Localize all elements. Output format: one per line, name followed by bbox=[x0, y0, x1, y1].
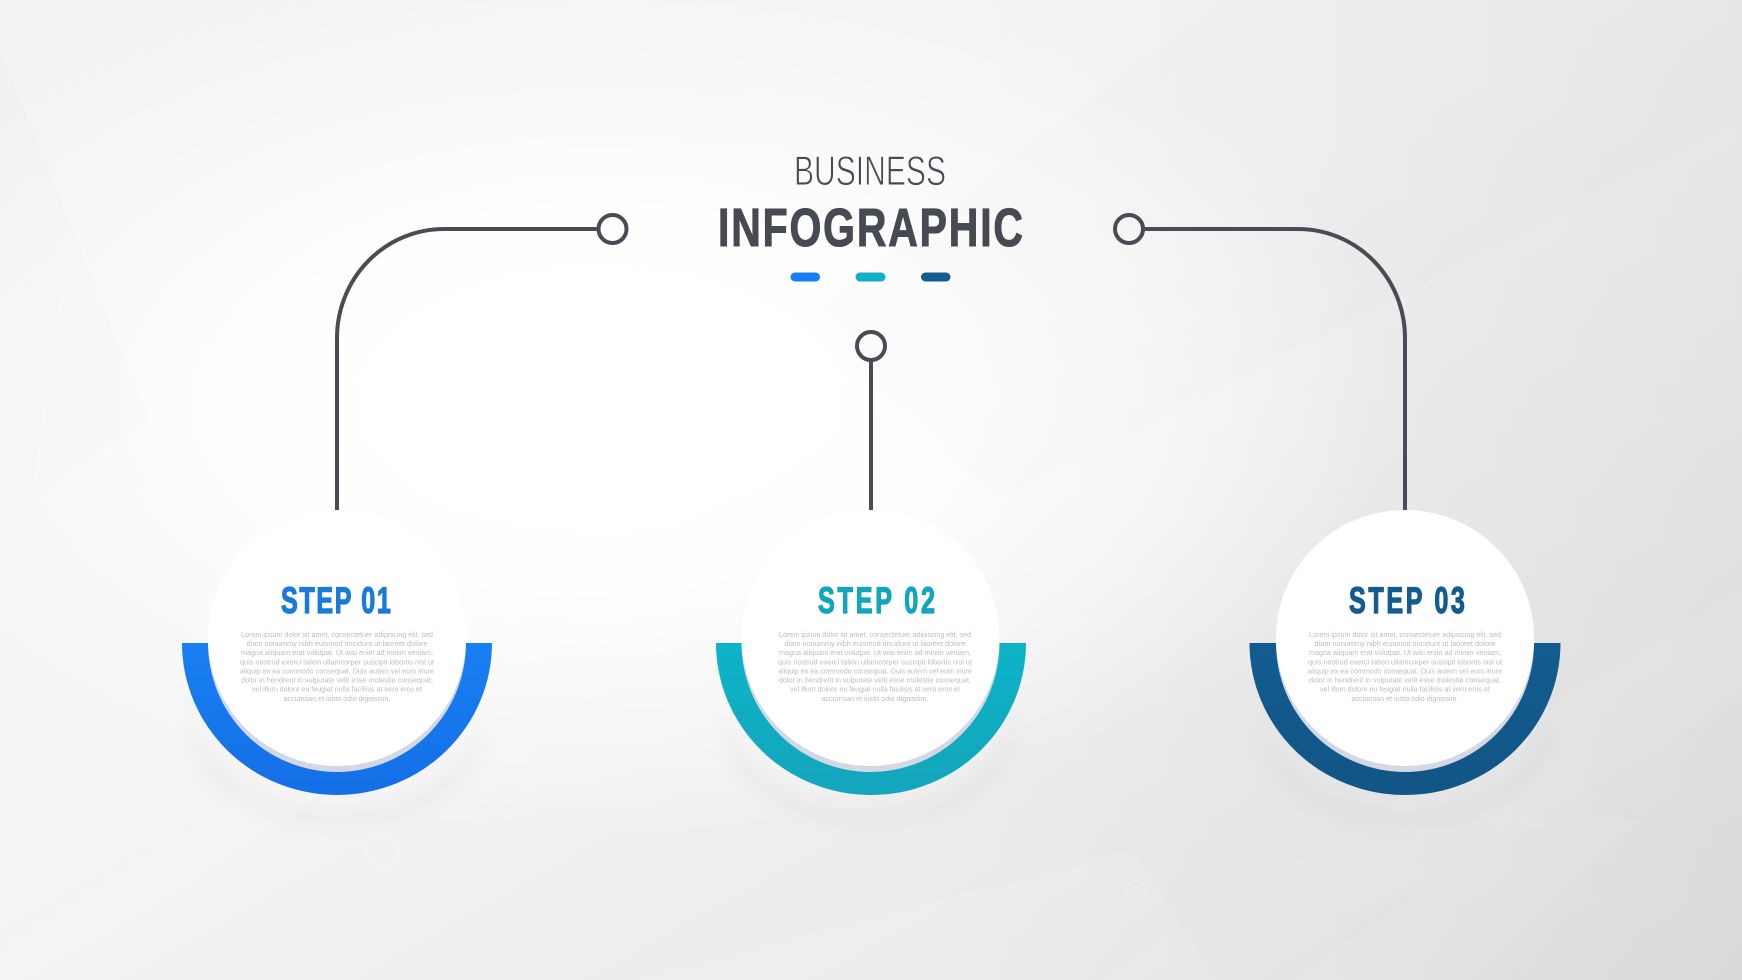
description: step 03: dolor in hendrerit in vulputate velit esse molestie consequat, bbox=[1309, 676, 1501, 684]
white circle bbox=[742, 510, 1000, 766]
title line: BUSINESS: BUSINESS bbox=[794, 147, 946, 194]
title accent dashes bbox=[790, 272, 950, 282]
description: step 01: aliquip ex ea commodo consequat. Duis autem vel eum iriure bbox=[240, 666, 434, 676]
description: step 01: dolor in hendrerit in vulputate velit esse molestie consequat, bbox=[241, 676, 433, 684]
description: step 03: accumsan et iusto odio dignissim. bbox=[1352, 694, 1458, 703]
description: step 01: quis nostrud exerci tation ullamcorper suscipit lobortis nisl ut bbox=[240, 658, 434, 666]
panel: step 02 bbox=[716, 510, 1026, 824]
panel: step 03 bbox=[1250, 510, 1560, 824]
description: step 03: diam nonummy nibh euismod tincidunt ut laoreet dolore bbox=[1314, 639, 1496, 648]
description: step 02: accumsan et iusto odio dignissim. bbox=[822, 694, 928, 703]
half ring: navy bbox=[1250, 643, 1560, 795]
description: step 03: aliquip ex ea commodo consequat. Duis autem vel eum iriure bbox=[1308, 666, 1502, 676]
panel: step 01 bbox=[182, 510, 492, 824]
description: step 02: quis nostrud exerci tation ullamcorper suscipit lobortis nisl ut bbox=[778, 658, 972, 666]
white circle bbox=[208, 510, 466, 766]
connector: step 3 line bbox=[1115, 215, 1405, 510]
heading: step 03: STEP 03 bbox=[1349, 579, 1465, 621]
ring shadow bbox=[192, 694, 482, 824]
ring shadow bbox=[1260, 694, 1550, 824]
description: step 03: magna aliquam erat volutpat. Ut wisi enim ad minim veniam, bbox=[1309, 648, 1501, 657]
description: step 02: diam nonummy nibh euismod tincidunt ut laoreet dolore bbox=[784, 639, 966, 648]
circle shadow bbox=[208, 514, 466, 772]
description: step 03: Lorem ipsum dolor sit amet, consectetuer adipiscing elit, sed bbox=[1309, 630, 1501, 639]
description: step 02: magna aliquam erat volutpat. Ut wisi enim ad minim veniam, bbox=[779, 648, 971, 657]
white circle bbox=[1276, 510, 1534, 766]
description: step 01: accumsan et iusto odio dignissim. bbox=[284, 694, 390, 703]
description: step 02: dolor in hendrerit in vulputate velit esse molestie consequat, bbox=[779, 676, 971, 684]
description: step 01: diam nonummy nibh euismod tincidunt ut laoreet dolore bbox=[246, 639, 428, 648]
description: step 01: Lorem ipsum dolor sit amet, consectetuer adipiscing elit, sed bbox=[241, 630, 433, 639]
title line: INFOGRAPHIC: INFOGRAPHIC bbox=[718, 199, 1023, 258]
connector: step 2 line bbox=[857, 332, 885, 512]
description: step 01 bbox=[240, 630, 434, 703]
connector: step 1 line bbox=[337, 215, 626, 510]
heading: step 02: STEP 02 bbox=[818, 579, 935, 621]
description: step 01: magna aliquam erat volutpat. Ut wisi enim ad minim veniam, bbox=[241, 648, 433, 657]
half ring: blue bbox=[182, 643, 492, 795]
description: step 03 bbox=[1308, 630, 1502, 703]
circle shadow bbox=[742, 514, 1000, 772]
description: step 02 bbox=[778, 630, 972, 703]
half ring: teal bbox=[716, 643, 1026, 795]
description: step 01: vel illum dolore eu feugiat nulla facilisis at vero eros et bbox=[252, 684, 422, 694]
description: step 02: vel illum dolore eu feugiat nulla facilisis at vero eros et bbox=[790, 684, 960, 694]
description: step 03: quis nostrud exerci tation ullamcorper suscipit lobortis nisl ut bbox=[1308, 658, 1502, 666]
description: step 02: aliquip ex ea commodo consequat. Duis autem vel eum iriure bbox=[778, 666, 972, 676]
heading: step 01: STEP 01 bbox=[281, 579, 391, 621]
title bbox=[718, 147, 1023, 258]
circle shadow bbox=[1276, 514, 1534, 772]
ring shadow bbox=[726, 694, 1016, 824]
description: step 03: vel illum dolore eu feugiat nulla facilisis at vero eros et bbox=[1320, 684, 1490, 694]
description: step 02: Lorem ipsum dolor sit amet, consectetuer adipiscing elit, sed bbox=[779, 630, 971, 639]
